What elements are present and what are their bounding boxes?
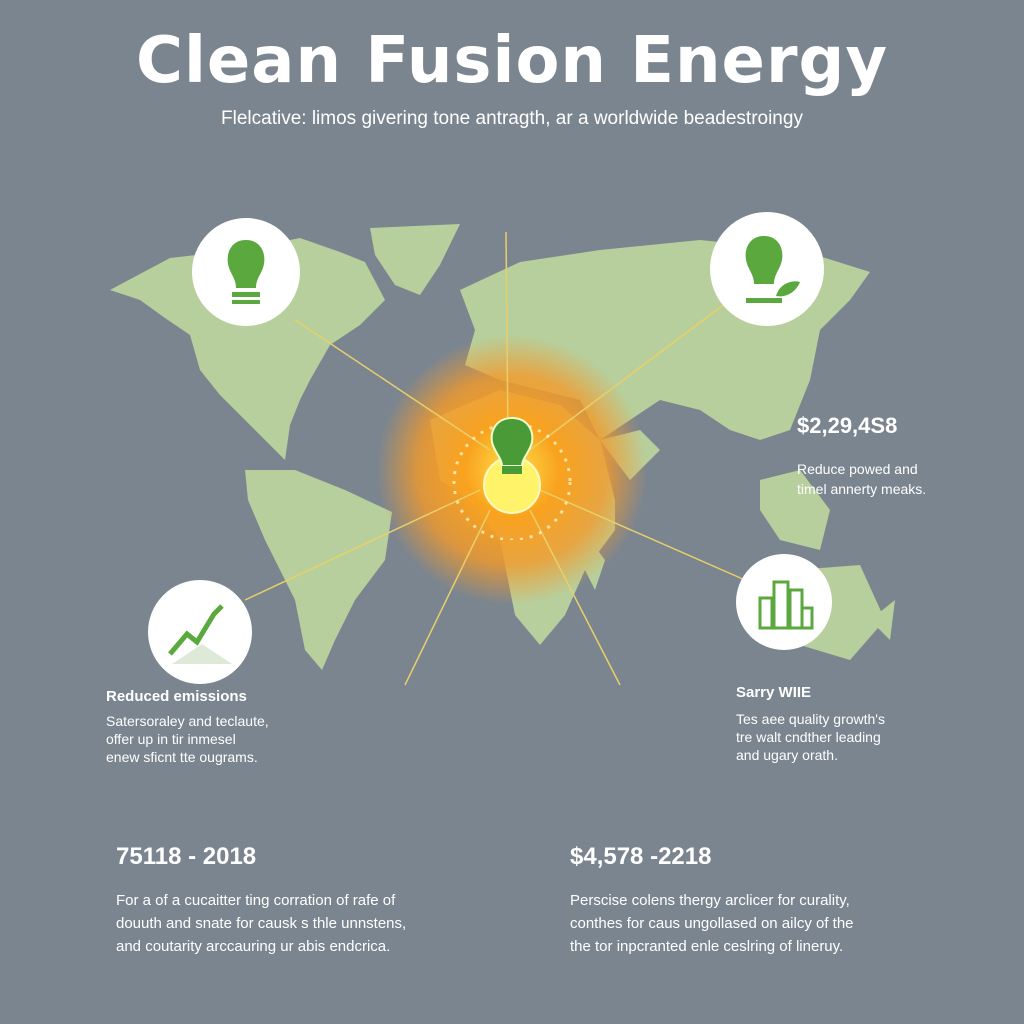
stat block: bottom right [570,843,854,955]
stat block: bottom right: the tor inpcranted enle ceslring of lineruy. [570,938,843,955]
icon circle: bulb top-right [710,212,824,326]
icon circle: growth chart [148,580,252,684]
icon circle: city [736,554,832,650]
stat block: bottom left: 75118 - 2018 [116,843,256,870]
stat: right top: Reduce powed and [797,461,918,477]
text: reduced emissions: offer up in tir inmesel [106,731,236,747]
stat: right top: timel annerty meaks. [797,481,926,497]
text: sarry wiie: and ugary orath. [736,747,838,763]
stat block: bottom right: $4,578 -2218 [570,843,711,870]
text: reduced emissions [106,688,269,765]
text: sarry wiie: tre walt cndther leading [736,729,881,745]
stat block: bottom right: Perscise colens thergy arclicer for curality, [570,892,850,909]
stat block: bottom left [116,843,406,955]
stat block: bottom left: For a of a cucaitter ting corration of rafe of [116,892,395,909]
icon circle: bulb top-left [192,218,300,326]
central bulb icon [452,417,572,540]
title: Clean Fusion Energy [136,24,888,98]
text: sarry wiie [736,684,885,763]
stat: right top: $2,29,4S8 [797,413,897,438]
stat block: bottom right: conthes for caus ungollased on ailcy of the [570,915,854,932]
stat: right top [797,413,926,497]
stat block: bottom left: and coutarity arccauring ur abis endcrica. [116,938,390,955]
text: reduced emissions: Satersoraley and teclaute, [106,713,269,729]
text: reduced emissions: Reduced emissions [106,688,247,705]
text: reduced emissions: enew sficnt tte ougrams. [106,749,258,765]
stat block: bottom left: douuth and snate for causk s thle unnstens, [116,915,406,932]
subtitle: Flelcative: limos givering tone antragth, ar a worldwide beadestroingy [221,108,803,129]
text: sarry wiie: Tes aee quality growth's [736,711,885,727]
text: sarry wiie: Sarry WIIE [736,684,811,701]
